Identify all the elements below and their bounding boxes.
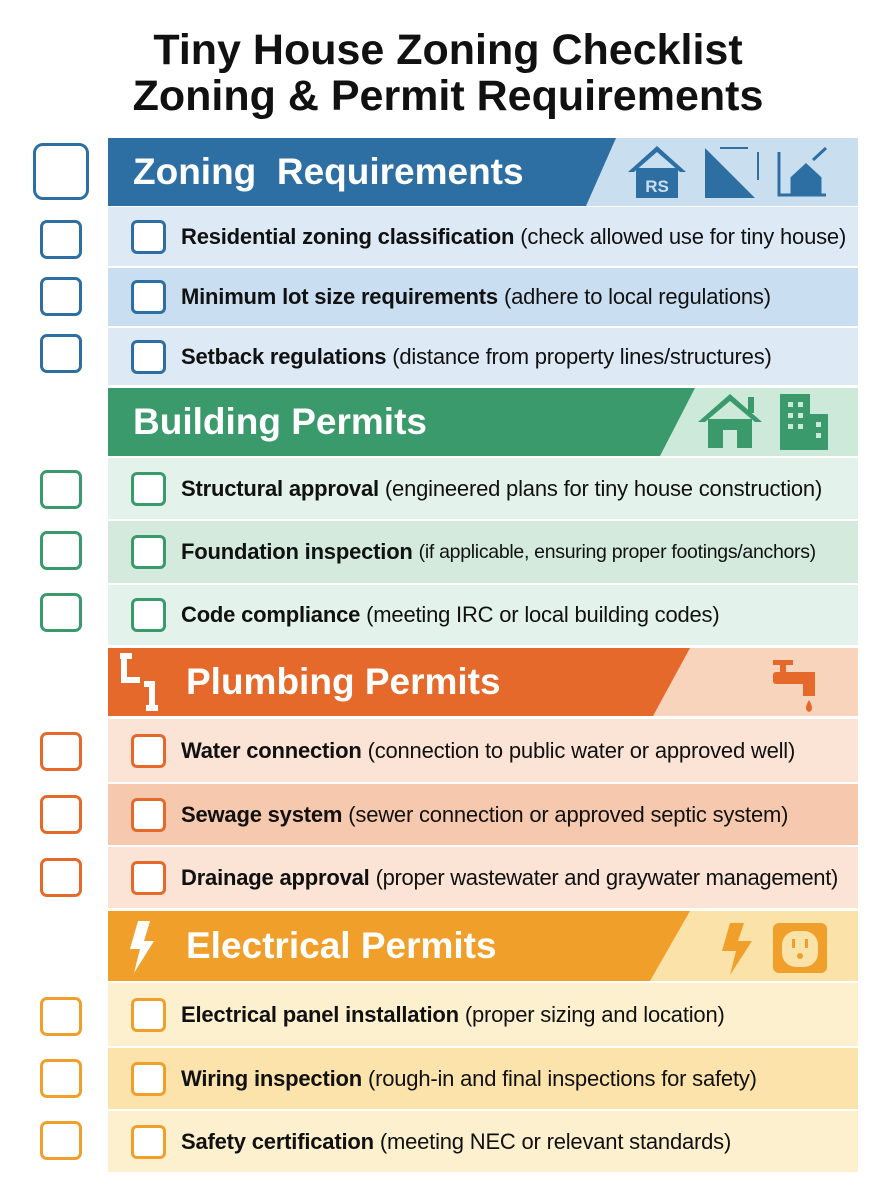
panel: building header — [108, 388, 858, 456]
icon: setback triangle — [705, 148, 758, 198]
icon: RS house — [628, 146, 686, 198]
checkbox — [40, 858, 82, 897]
icon: house — [698, 394, 762, 448]
row: setback: Setback regulations — [181, 344, 386, 368]
panel: plumbing header: Plumbing Permits — [186, 661, 501, 702]
title — [133, 26, 763, 120]
title: Zoning & Permit Requirements — [133, 72, 763, 120]
row: water: (connection to public water or approved well) — [368, 738, 795, 762]
icon: outlet — [773, 923, 827, 973]
row: code: (meeting IRC or local building codes) — [366, 602, 719, 627]
panel: plumbing header — [108, 648, 858, 716]
checkbox — [40, 1121, 82, 1160]
panel: zoning header: Zoning Requirements — [133, 151, 524, 192]
icon: bolt white — [130, 921, 154, 973]
row: foundation — [108, 521, 858, 583]
row: setback — [108, 328, 858, 385]
checkbox — [40, 732, 82, 771]
icon: RS house: RS — [645, 177, 669, 196]
row: sewage: Sewage system — [181, 802, 342, 826]
panel: electrical header — [108, 911, 858, 981]
row: sewage: (sewer connection or approved septic system) — [348, 802, 788, 826]
checkbox — [40, 277, 82, 316]
row: sewage — [108, 784, 858, 845]
row: residential zoning: Residential zoning classification — [181, 224, 514, 248]
row: structural — [108, 458, 858, 519]
row: water — [108, 719, 858, 782]
row: drainage: (proper wastewater and graywater management) — [376, 864, 838, 890]
row: lot size — [108, 268, 858, 326]
panel: electrical header: Electrical Permits — [186, 925, 497, 966]
row: code — [108, 585, 858, 645]
checkbox — [40, 220, 82, 259]
row: safety: (meeting NEC or relevant standards) — [380, 1128, 731, 1154]
row: safety: Safety certification — [181, 1128, 374, 1154]
checkbox — [40, 334, 82, 373]
icon: building — [780, 394, 828, 450]
icon: bolt orange — [722, 923, 752, 975]
row: structural: (engineered plans for tiny house construction) — [385, 476, 822, 500]
icon: house with arrows — [779, 148, 826, 195]
row: structural: Structural approval — [181, 476, 379, 500]
checkbox: zoning header — [33, 143, 89, 200]
title: Tiny House Zoning Checklist — [153, 26, 743, 74]
row: drainage: Drainage approval — [181, 864, 370, 890]
icon: faucet — [773, 660, 815, 712]
row: lot size: Minimum lot size requirements — [181, 284, 498, 309]
row: code: Code compliance — [181, 602, 360, 627]
row: panel: Electrical panel installation — [181, 1002, 459, 1026]
panel: zoning header — [108, 138, 858, 206]
checkbox — [40, 470, 82, 509]
row: panel — [108, 983, 858, 1046]
checkbox — [40, 593, 82, 632]
row: wiring: Wiring inspection — [181, 1066, 362, 1090]
panel: building header: Building Permits — [133, 401, 427, 442]
row: safety — [108, 1111, 858, 1172]
row: wiring: (rough-in and final inspections for safety) — [368, 1066, 757, 1090]
checkbox — [40, 795, 82, 834]
row: lot size: (adhere to local regulations) — [504, 284, 771, 309]
row: residential zoning — [108, 207, 858, 266]
row: residential zoning: (check allowed use for tiny house) — [520, 224, 846, 248]
row: wiring — [108, 1048, 858, 1109]
row: foundation: (if applicable, ensuring proper footings/anchors) — [419, 540, 816, 562]
row: panel: (proper sizing and location) — [465, 1002, 725, 1026]
checkbox — [40, 531, 82, 570]
icon: pipe — [120, 656, 158, 708]
checkbox — [40, 997, 82, 1036]
row: water: Water connection — [181, 738, 362, 762]
row: drainage — [108, 847, 858, 908]
row: foundation: Foundation inspection — [181, 539, 413, 564]
row: setback: (distance from property lines/structures) — [392, 344, 772, 368]
checkbox — [40, 1059, 82, 1098]
